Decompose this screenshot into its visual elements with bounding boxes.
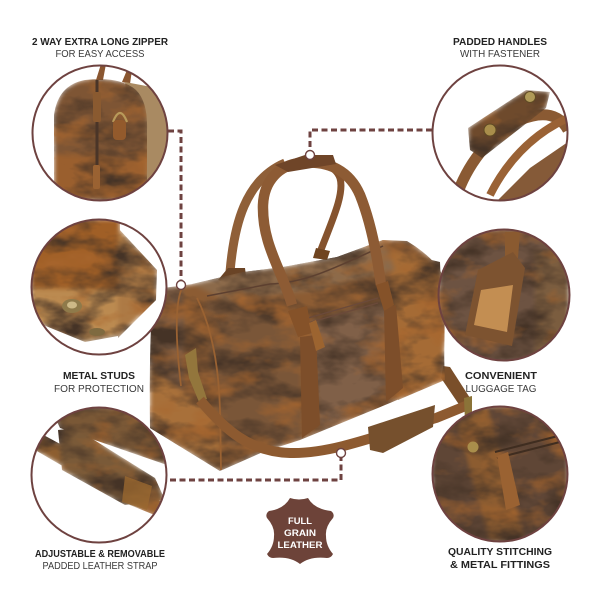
- label: strap: [35, 548, 165, 572]
- brass stud: [484, 124, 496, 136]
- tag strap: [505, 232, 520, 258]
- brass stud: [468, 442, 478, 452]
- far handle: [230, 163, 285, 272]
- strap pad: [368, 405, 435, 453]
- label: zipper: [32, 36, 168, 60]
- label: stitching: [448, 546, 552, 571]
- hide shape: [266, 498, 334, 564]
- badge: full grain leather: LEATHER: [278, 540, 323, 551]
- circle: stitching and fittings detail: [432, 406, 568, 542]
- near handle: [263, 163, 381, 305]
- label: strap: PADDED LEATHER STRAP: [42, 560, 158, 572]
- white anchor dots: [176, 280, 186, 290]
- label: handles: PADDED HANDLES: [453, 36, 547, 48]
- circle: metal studs detail: [31, 219, 167, 355]
- metal stud: [62, 299, 82, 313]
- luggage tag: [465, 252, 525, 346]
- handle tabs: [288, 306, 312, 337]
- metal stud: [89, 328, 105, 336]
- badge: full grain leather: FULL: [288, 516, 312, 527]
- label: metal studs: [54, 370, 144, 395]
- far handle tab: [313, 248, 330, 260]
- label: strap: ADJUSTABLE & REMOVABLE: [35, 548, 165, 560]
- shoulder strap: [200, 400, 468, 453]
- label: luggage tag: CONVENIENT: [465, 370, 538, 382]
- zipper: [495, 435, 564, 458]
- side clasp: [185, 348, 207, 402]
- connector: zipper callout dashed line: [168, 131, 181, 284]
- badge: full grain leather: [266, 498, 334, 564]
- label: metal studs: METAL STUDS: [63, 370, 135, 382]
- strap buckle: [464, 396, 472, 422]
- front strap bands: [300, 335, 320, 438]
- label: luggage tag: LUGGAGE TAG: [466, 383, 536, 395]
- label: luggage tag: [465, 370, 538, 395]
- connector: strap callout dashed line: [168, 455, 341, 480]
- label: handles: [453, 36, 547, 60]
- circle: luggage tag detail: [438, 230, 570, 362]
- label: handles: WITH FASTENER: [460, 48, 540, 60]
- label: zipper: FOR EASY ACCESS: [56, 48, 144, 60]
- badge: full grain leather: GRAIN: [284, 528, 316, 539]
- label: stitching: QUALITY STITCHING: [448, 546, 552, 558]
- label: stitching: & METAL FITTINGS: [450, 559, 550, 571]
- zipper pull: [497, 452, 520, 510]
- circle: padded strap detail: [31, 407, 167, 543]
- label: metal studs: FOR PROTECTION: [54, 383, 144, 395]
- label: zipper: 2 WAY EXTRA LONG ZIPPER: [32, 36, 168, 48]
- pocket zipper: [308, 298, 378, 323]
- circle: zipper detail: [32, 64, 168, 201]
- brass stud: [524, 92, 536, 102]
- shoulder strap behind: [441, 366, 470, 406]
- main product: leather duffel bag: [150, 150, 472, 471]
- bag body: [150, 240, 445, 471]
- zipper pull: [309, 320, 325, 351]
- circle: padded handles detail: [432, 65, 568, 201]
- bag seam and piping: [177, 288, 221, 470]
- connector: handles callout dashed line: [310, 130, 432, 152]
